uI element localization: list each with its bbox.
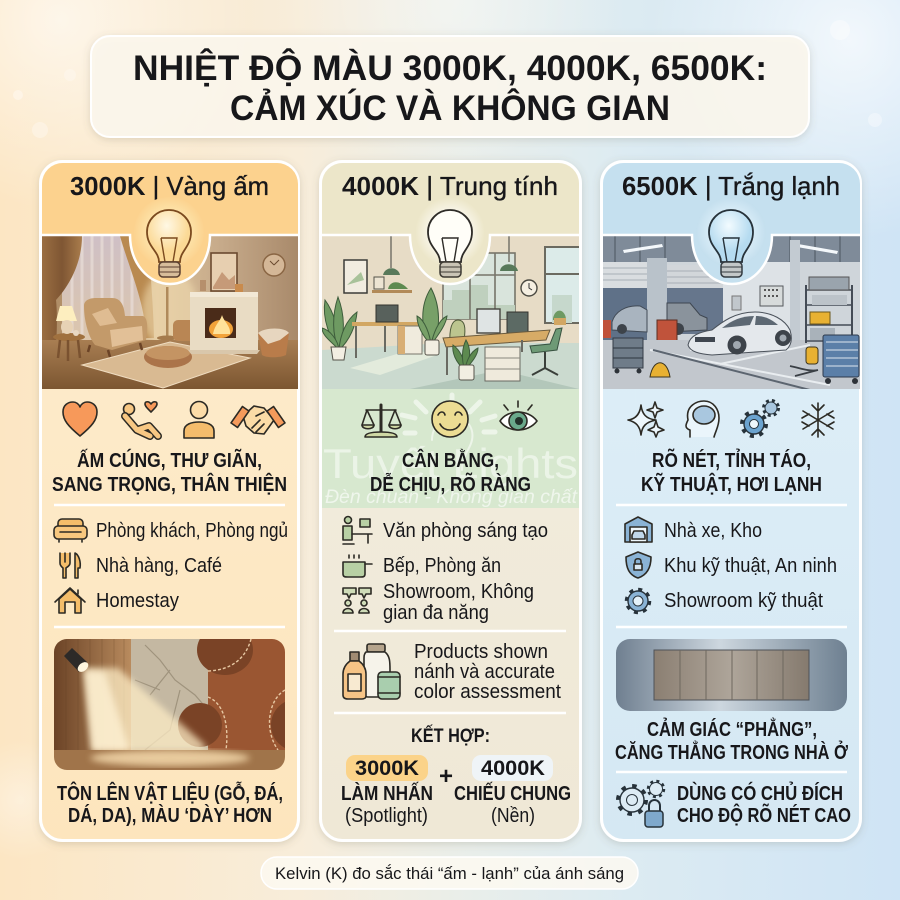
icon: snowflake bbox=[802, 403, 834, 437]
heading: 4000K: 4000K | Trung tính bbox=[342, 171, 558, 201]
icon: showroom bbox=[343, 588, 371, 613]
use: showroom: Showroom kỹ thuật bbox=[664, 590, 823, 612]
icon: neutral bulb bbox=[415, 197, 485, 277]
general lighting label bbox=[454, 782, 571, 827]
icon: sofa bbox=[54, 519, 87, 542]
panel: 3000K warm yellow bbox=[40, 162, 323, 840]
icon: house bbox=[55, 588, 85, 613]
icon: desk worker bbox=[343, 516, 372, 544]
icon: scales bbox=[362, 405, 401, 437]
icon: sparkles bbox=[628, 402, 664, 437]
keywords 4000K bbox=[370, 448, 531, 496]
products note: nánh và accurate bbox=[414, 661, 555, 683]
purposeful use note: CHO ĐỘ RÕ NÉT CAO bbox=[677, 803, 851, 827]
badge: 4000K: 4000K bbox=[481, 757, 545, 780]
icon: relaxing person bbox=[124, 402, 158, 436]
plus sign: + bbox=[439, 763, 453, 790]
accent label: LÀM NHẤN bbox=[341, 782, 433, 805]
green watermark band bbox=[322, 389, 579, 508]
watermark brand: Tuyết Lights bbox=[323, 440, 578, 487]
combine heading: KẾT HỢP: bbox=[411, 725, 490, 747]
caption 3000K bbox=[57, 781, 283, 827]
products note bbox=[414, 641, 561, 703]
icon: brain head bbox=[686, 401, 719, 437]
header band bbox=[603, 163, 860, 284]
header band bbox=[322, 163, 579, 284]
header band bbox=[42, 163, 298, 284]
use: showroom: gian đa năng bbox=[383, 602, 489, 624]
icon: warm bulb bbox=[134, 197, 204, 277]
keywords 3000K: SANG TRỌNG, THÂN THIỆN bbox=[52, 472, 287, 496]
accent label: (Spotlight) bbox=[345, 805, 428, 827]
title panel bbox=[91, 36, 809, 137]
heading: 3000K: 3000K | Vàng ấm bbox=[70, 171, 269, 201]
badge: 3000K bbox=[346, 755, 428, 781]
icon: gears and lock bbox=[618, 781, 664, 827]
use: kitchen: Bếp, Phòng ăn bbox=[383, 555, 501, 577]
image: flat lit panel bbox=[616, 639, 847, 711]
header edge bbox=[603, 235, 860, 284]
image: spotlight on materials bbox=[54, 639, 285, 770]
use: living room: Phòng khách, Phòng ngủ bbox=[96, 520, 288, 542]
use: office: Văn phòng sáng tạo bbox=[383, 520, 548, 542]
icon: person bbox=[184, 402, 214, 438]
badge: 3000K: 3000K bbox=[355, 757, 419, 780]
keywords 4000K: DỄ CHỊU, RÕ RÀNG bbox=[370, 472, 531, 496]
panel: 6500K cold white bbox=[602, 162, 860, 840]
heading: 6500K: 6500K | Trắng lạnh bbox=[622, 171, 840, 201]
use: showroom bbox=[383, 581, 534, 624]
watermark sun bbox=[402, 395, 495, 470]
keywords 4000K: CÂN BẰNG, bbox=[402, 448, 499, 472]
use: showroom: Showroom, Không bbox=[383, 581, 534, 603]
caption 3000K: TÔN LÊN VẬT LIỆU (GỖ, ĐÁ, bbox=[57, 781, 283, 805]
watermark tagline: Đèn chuẩn - Không gian chất bbox=[325, 487, 578, 508]
footer note bbox=[261, 857, 638, 889]
icon: pot bbox=[343, 555, 372, 577]
keywords 3000K: ẤM CÚNG, THƯ GIÃN, bbox=[77, 448, 262, 472]
image: garage bbox=[603, 236, 860, 390]
icon: heart bbox=[63, 402, 97, 436]
caption 3000K: DÁ, DA), MÀU ‘DÀY’ HƠN bbox=[68, 804, 272, 827]
keywords 6500K bbox=[641, 448, 822, 496]
badge: 4000K bbox=[472, 755, 553, 781]
caption 6500K: CĂNG THẲNG TRONG NHÀ Ở bbox=[615, 740, 849, 764]
accent label bbox=[341, 782, 433, 827]
purposeful use note bbox=[677, 781, 851, 827]
icon: handshake bbox=[231, 406, 285, 434]
icon: product bottles bbox=[343, 644, 400, 699]
caption 6500K: CẢM GIÁC “PHẲNG”, bbox=[647, 718, 817, 741]
title line 1: NHIỆT ĐỘ MÀU 3000K, 4000K, 6500K: bbox=[133, 48, 767, 88]
icon: shield bbox=[626, 552, 651, 578]
use: restaurant: Nhà hàng, Café bbox=[96, 555, 222, 577]
title line 2: CẢM XÚC VÀ KHÔNG GIAN bbox=[230, 88, 670, 128]
icon: gear bbox=[626, 590, 650, 612]
icon: smile bbox=[432, 401, 468, 437]
general lighting label: CHIẾU CHUNG bbox=[454, 782, 571, 805]
icon: eye bbox=[500, 401, 537, 430]
header edge bbox=[42, 235, 298, 284]
keywords 6500K: RÕ NÉT, TỈNH TÁO, bbox=[652, 448, 811, 472]
use: technical: Khu kỹ thuật, An ninh bbox=[664, 555, 837, 577]
image: bright office bbox=[322, 236, 581, 389]
image: cozy living room bbox=[42, 236, 298, 389]
icon: cutlery bbox=[60, 553, 80, 578]
icon: cold bulb bbox=[696, 197, 766, 277]
keywords 3000K bbox=[52, 448, 287, 496]
caption 6500K bbox=[615, 718, 849, 764]
use: homestay: Homestay bbox=[96, 590, 179, 612]
panel: 4000K neutral bbox=[320, 162, 581, 840]
products note: Products shown bbox=[414, 641, 548, 663]
products note: color assessment bbox=[414, 681, 561, 703]
header edge bbox=[322, 235, 579, 284]
purposeful use note: DÙNG CÓ CHỦ ĐÍCH bbox=[677, 781, 843, 805]
keywords 6500K: KỸ THUẬT, HƠI LẠNH bbox=[641, 472, 822, 496]
use: garage: Nhà xe, Kho bbox=[664, 520, 762, 542]
footer note: Kelvin (K) đo sắc thái “ấm - lạnh” của ánh sáng bbox=[275, 864, 624, 883]
icon: gears bbox=[742, 400, 778, 436]
icon: garage bbox=[625, 517, 652, 542]
general lighting label: (Nền) bbox=[491, 805, 535, 827]
